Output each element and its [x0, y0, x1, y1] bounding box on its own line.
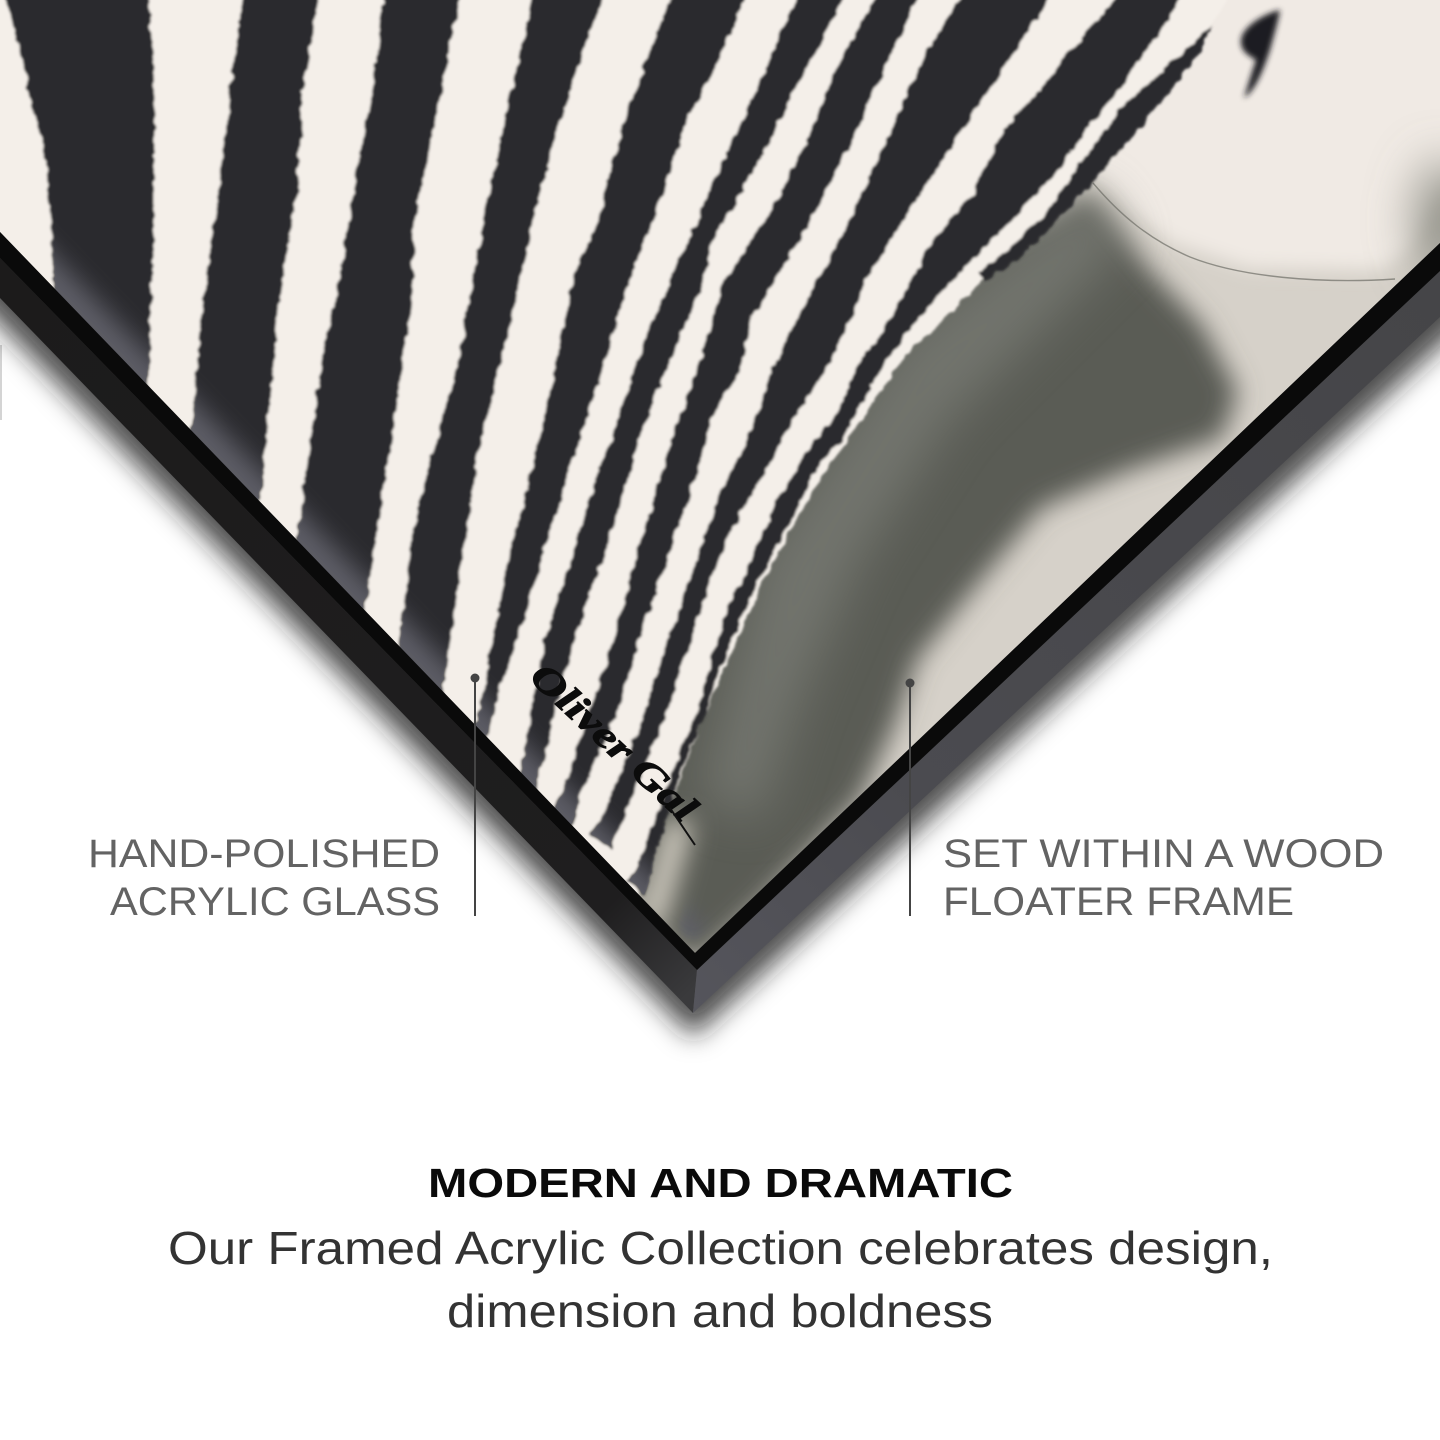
stripe 3: [294, 0, 461, 612]
frame left matte side: [0, 258, 697, 1013]
stripe 5: [473, 0, 746, 738]
stripe 7: [548, 0, 929, 830]
stripe fade along frame edge: [53, 240, 700, 936]
label: hand-polished acrylic glass: ACRYLIC GLASS: [110, 880, 440, 924]
callout: acrylic glass pointer: [470, 674, 480, 916]
pale corner glow: [650, 820, 680, 925]
heading: MODERN AND DRAMATIC: [428, 1160, 1013, 1206]
stripe 6: [505, 0, 856, 810]
label: hand-polished acrylic glass: [88, 832, 440, 924]
signature: Oliver Gal: [522, 655, 706, 831]
stripe 10: [978, 26, 1212, 282]
shaded corner of head: [1415, 160, 1440, 280]
zebra head highlight: [1085, 0, 1440, 270]
artwork: zebra photograph: [0, 0, 1440, 1000]
description: Our Framed Acrylic Collection celebrates design,: [168, 1222, 1273, 1274]
label: wood floater frame: SET WITHIN A WOOD: [943, 832, 1384, 876]
stripe 8: [590, 0, 1063, 850]
stripe 9: [625, 0, 1197, 895]
mouth line: [1093, 183, 1395, 281]
frame right grey side: [693, 271, 1440, 1013]
nostril: [1241, 10, 1280, 98]
stripe 2: [185, 0, 322, 530]
description: [168, 1222, 1273, 1337]
zebra body: [0, 0, 1245, 960]
glossy black lip: [0, 232, 1440, 970]
label: wood floater frame: FLOATER FRAME: [943, 880, 1294, 924]
lighter neck tone near zebra: [700, 185, 1130, 820]
label: wood floater frame: [943, 832, 1384, 924]
signature: [522, 655, 706, 845]
zebra stripes: [0, 0, 1245, 960]
grey neck shadow: [620, 195, 1238, 965]
description: dimension and boldness: [447, 1285, 993, 1337]
stripe 4: [395, 0, 610, 730]
callout: wood frame pointer: [906, 678, 914, 916]
frame drop shadow: [0, 0, 1440, 1037]
stripe 1: [0, 0, 154, 400]
background behind zebra: [638, 170, 1440, 953]
label: hand-polished acrylic glass: HAND-POLISHED: [88, 832, 440, 876]
frame: [0, 232, 1440, 1013]
